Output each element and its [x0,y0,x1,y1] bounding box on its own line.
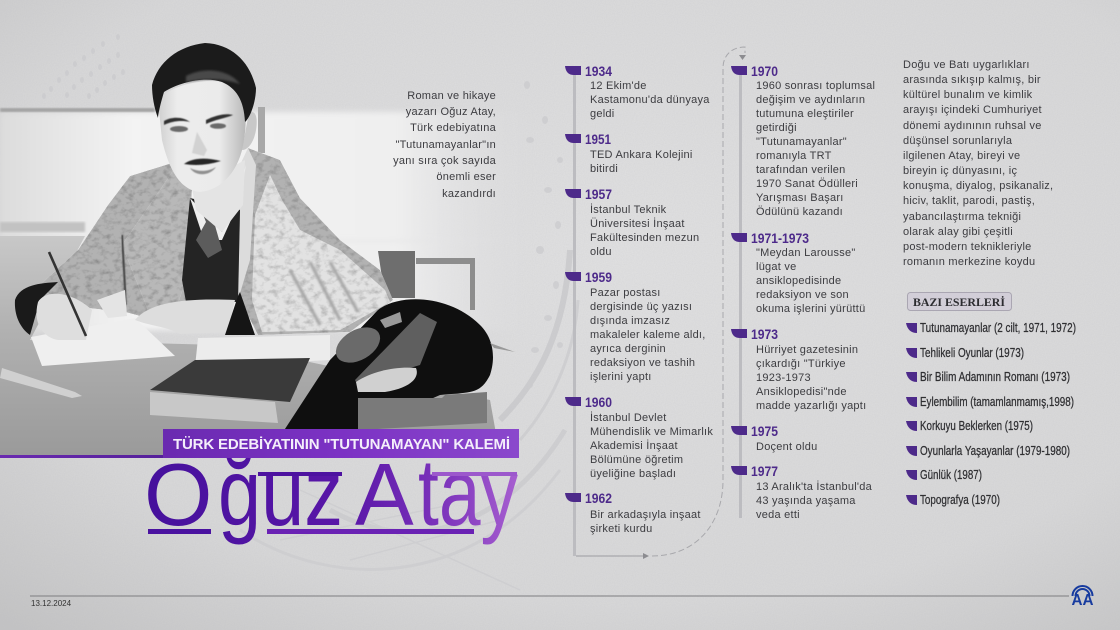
1934: 1934 [585,63,612,79]
works list: Günlük (1987) [920,468,982,482]
1970 [731,63,875,218]
1970: tarafından verilen [756,164,846,176]
footer rule [30,596,1069,597]
1970: Yarışması Başarı [756,192,844,204]
works list [906,321,1076,507]
timeline column 2 [731,63,875,521]
1971-1973: lügat ve [756,261,797,273]
1960 [565,394,713,480]
works list: Korkuyu Beklerken (1975) [920,419,1033,433]
banner headline: TÜRK EDEBİYATININ "TUTUNAMAYAN" KALEMİ [173,436,510,453]
1934 [565,63,710,120]
1977 [731,463,873,521]
1957: 1957 [585,186,612,202]
jacket [40,148,393,335]
intro text: kazandırdı [442,188,496,200]
right description text: kültürel bunalım ve kimlik [903,89,1033,101]
1959 [565,269,706,383]
right description text: ilgilenen Atay, bireyi ve [903,150,1020,162]
1960: İstanbul Devlet [590,411,667,424]
book [150,358,310,423]
desk [0,236,500,456]
chair and frame [378,251,475,310]
1970: Ödülünü kazandı [756,206,843,218]
title: Oğuz Atay [144,440,518,546]
right description text: düşünsel sorunlarıyla [903,135,1013,147]
right description text: romanın merkezine koydu [903,256,1035,268]
intro text: önemli eser [436,171,496,183]
title: Oğuz Atay: A [355,445,414,544]
1977: 43 yaşında yaşama [756,495,856,507]
1970: getirdiği [756,122,797,134]
intro text: Roman ve hikaye [407,90,496,102]
1962: şirketi kurdu [590,523,653,535]
works list: Bir Bilim Adamının Romanı (1973) [920,370,1070,384]
1962: Bir arkadaşıyla inşaat [590,509,701,521]
1970: değişim ve aydınların [756,94,865,106]
1957: oldu [590,246,612,258]
1977: 13 Aralık'ta İstanbul'da [756,480,873,493]
1960: 1960 [585,394,612,410]
1951 [565,131,693,175]
1970: 1960 sonrası toplumsal [756,80,875,92]
right description text: arasında sıkışıp kalmış, bir [903,74,1041,86]
1970: romanıyla TRT [756,150,832,162]
intro text: Türk edebiyatına [410,122,497,134]
1934: Kastamonu'da dünyaya [590,94,710,106]
1973: 1923-1973 [756,372,811,384]
timeline connector lines [573,47,746,559]
works heading [908,292,1012,310]
title: Oğuz Atay: O [144,445,212,544]
1957: Üniversitesi İnşaat [590,217,685,230]
1971-1973: "Meydan Larousse" [756,247,856,259]
1951: bitirdi [590,163,618,175]
1957: İstanbul Teknik [590,203,667,216]
right description text: dönemi aydınının ruhsal ve [903,120,1042,132]
right description text: olarak alay gibi çeşitli [903,226,1013,238]
1971-1973: 1971-1973 [751,230,809,246]
1970: "Tutunamayanlar" [756,136,847,148]
head [152,43,257,192]
1934: 12 Ekim'de [590,80,647,92]
1977: veda etti [756,509,800,521]
works heading: BAZI ESERLERİ [913,295,1005,309]
1962: 1962 [585,490,612,506]
1973: çıkardığı "Türkiye [756,358,846,370]
icon: AA logo: AA [1072,592,1094,609]
1959: ayrıca derginin [590,343,666,355]
right description text: post-modern teknikleriyle [903,241,1032,253]
1957: Fakültesinden mezun [590,232,699,244]
neck [192,160,245,232]
1959: Pazar postası [590,287,661,299]
1973: 1973 [751,326,778,342]
title: Oğuz Atay: tay [418,440,518,546]
works list: Tehlikeli Oyunlar (1973) [920,346,1024,360]
1959: makaleler kaleme aldı, [590,329,706,341]
1973: Ansiklopedisi"nde [756,386,847,398]
date: 13.12.2024 [31,599,72,608]
1957 [565,186,699,258]
right description text: konuşma, diyalog, psikanaliz, [903,180,1053,192]
1977: 1977 [751,463,778,479]
right description text [903,59,1053,268]
1934: geldi [590,108,614,120]
intro text: "Tutunamayanlar"ın [395,139,496,151]
1971-1973: redaksiyon ve son [756,289,849,301]
1960: Mühendislik ve Mimarlık [590,426,713,438]
photo: Oğuz Atay at his desk [0,43,530,456]
intro text [393,90,497,200]
banner headline [0,429,519,458]
works list: Topografya (1970) [920,493,1000,507]
1973: Hürriyet gazetesinin [756,344,858,356]
grunge splatter decoration [42,34,578,590]
1951: TED Ankara Kolejini [590,149,693,161]
1970: tutumuna eleştiriler [756,108,854,120]
1962 [565,490,701,535]
1960: üyeliğine başladı [590,468,676,480]
title: Oğuz Atay: ğuz [218,440,343,546]
1959: dışında imzasız [590,315,670,327]
works list: Tutunamayanlar (2 cilt, 1971, 1972) [920,321,1076,335]
1973 [731,326,866,412]
1970: 1970 [751,63,778,79]
right description text: yabancılaştırma tekniği [903,211,1021,223]
right description text: arayışı içindeki Cumhuriyet [903,104,1042,116]
1975: 1975 [751,423,778,439]
1959: dergisinde üç yazısı [590,301,692,313]
1959: işlerini yaptı [590,371,652,383]
intro text: yazarı Oğuz Atay, [406,106,496,118]
1971-1973: okuma işlerini yürüttü [756,303,865,315]
1971-1973 [731,230,865,315]
telephone [283,299,515,432]
1970: 1970 Sanat Ödülleri [756,178,858,190]
right description text: hiciv, taklit, parodi, pastiş, [903,195,1035,207]
1959: redaksiyon ve tashih [590,357,695,369]
1975 [731,423,817,453]
1960: Akademisi İnşaat [590,439,678,452]
intro text: yanı sıra çok sayıda [393,155,497,167]
hands, pencil and papers [0,252,330,398]
photo background wall [0,107,530,330]
1971-1973: ansiklopedisinde [756,275,841,287]
works list: Eylembilim (tamamlanmamış,1998) [920,395,1074,409]
1975: Doçent oldu [756,441,817,453]
vest and tie [182,165,246,302]
1951: 1951 [585,131,611,147]
timeline column 1 [565,63,713,535]
1959: 1959 [585,269,612,285]
works list: Oyunlarla Yaşayanlar (1979-1980) [920,444,1070,458]
1973: madde yazarlığı yaptı [756,400,866,412]
right description text: Doğu ve Batı uygarlıkları [903,59,1030,71]
right description text: bireyin iç dünyasını, iç [903,165,1017,177]
1960: Bölümüne öğretim [590,454,683,466]
